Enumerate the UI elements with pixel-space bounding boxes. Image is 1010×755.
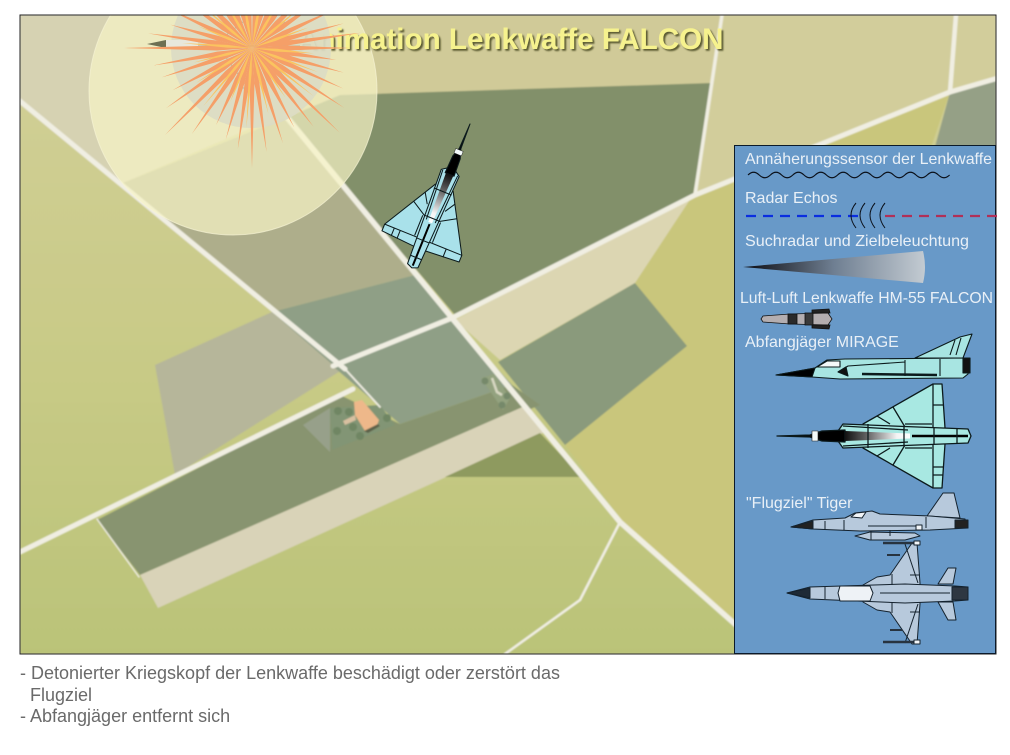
field: lower tan [155, 312, 345, 475]
legend label: target: "Flugziel" Tiger [746, 495, 853, 512]
icon: tiger top view [787, 541, 968, 644]
explosion: inner sensor radius [171, 16, 331, 128]
field: top left beige [20, 16, 248, 182]
field: dark top field [285, 83, 712, 315]
field: house plot [367, 404, 387, 417]
icon: mirage top view [777, 384, 971, 488]
field: top band [20, 15, 725, 160]
field: beige right of crossing [455, 195, 693, 360]
panel: legend [734, 146, 998, 654]
legend label: mirage: Abfangjäger MIRAGE [745, 334, 899, 351]
legend label: sensor: Annäherungssensor der Lenkwaffe [745, 151, 992, 168]
field: right yellow wedge [621, 96, 949, 618]
explosion: large blast radius [89, 0, 377, 235]
icon: small farmstead [482, 377, 510, 408]
icon: falcon missile [761, 309, 832, 329]
caption text: - Detonierter Kriegskopf der Lenkwaffe beschädigt oder zerstört das Flugziel - Abfangjäger entfernt sich [20, 663, 560, 726]
explosion burst [126, 16, 360, 166]
missile [147, 40, 198, 47]
icon: sensor wave [748, 172, 950, 178]
legend label: missile: Luft-Luft Lenkwaffe HM-55 FALCON [740, 290, 993, 307]
field: dark olive wedge [445, 433, 582, 477]
legend label: radar echoes: Radar Echos [745, 190, 838, 207]
field: right grey corner [935, 81, 996, 145]
icon: farmhouse [333, 400, 391, 440]
icon: mirage side view [776, 334, 972, 379]
icon: radar echo line [746, 203, 998, 228]
field: grey green right [498, 283, 687, 445]
field: tan strip [140, 405, 545, 608]
field: grey green centre [335, 318, 512, 424]
target aircraft ghost [198, 22, 300, 88]
legend label: search radar: Suchradar und Zielbeleuchtung [745, 233, 969, 250]
interceptor jet [381, 124, 470, 268]
icon: radar beam [743, 251, 925, 283]
icon: tiger side view [791, 493, 968, 540]
field: long dark field [97, 385, 540, 575]
field: tan between roads [118, 118, 415, 312]
title: Animation Lenkwaffe FALCON [296, 23, 724, 56]
field: grey green centre left [272, 275, 452, 365]
field: top right [698, 109, 897, 190]
